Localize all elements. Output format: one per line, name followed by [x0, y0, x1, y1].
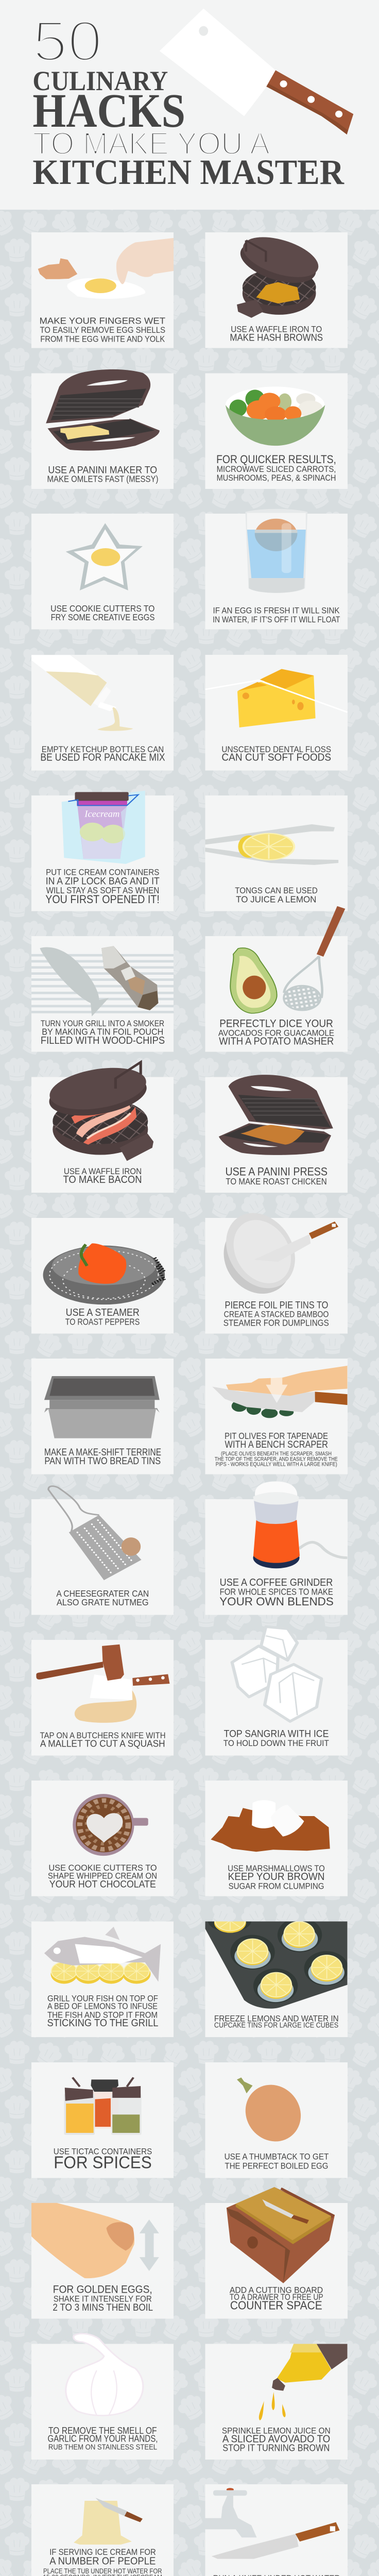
caption [221, 744, 331, 763]
caption: A CHEESEGRATER CAN [56, 1588, 149, 1599]
caption [215, 1431, 338, 1467]
caption: ADD A CUTTING BOARD [230, 2285, 323, 2295]
caption: MAKE YOUR FINGERS WET [40, 316, 165, 326]
caption: A BED OF LEMONS TO INFUSE [47, 2001, 158, 2011]
caption: TO EASILY REMOVE EGG SHELLS [40, 326, 165, 335]
panel: whipped cream shapes [31, 1781, 174, 1896]
caption [216, 453, 336, 483]
caption: AVOCADOS FOR GUACAMOLE [218, 1028, 334, 1038]
panel: cheese grater nutmeg [31, 1486, 174, 1615]
caption: 2 TO 3 MINS THEN BOIL [53, 2302, 153, 2313]
caption [56, 1588, 149, 1607]
caption: SUGAR FROM CLUMPING [229, 1882, 324, 1891]
caption: IF AN EGG IS FRESH IT WILL SINK [213, 605, 340, 615]
caption: TONGS CAN BE USED [235, 886, 318, 895]
caption: STOP IT TURNING BROWN [222, 2443, 330, 2453]
icon: drawer with cutting board [227, 2187, 335, 2283]
caption: YOU FIRST OPENED IT! [45, 893, 160, 906]
icon: ice cream tub in zip bag [62, 791, 145, 864]
icon: egg and thumbtack [237, 2077, 307, 2146]
panel: tongs juice lemon [205, 795, 348, 911]
panel: grill smoker [31, 936, 174, 1052]
caption: TO REMOVE THE SMELL OF [48, 2426, 157, 2436]
caption: A SLICED AVOVADO TO [222, 2433, 330, 2445]
icon: brown sugar and marshmallows [211, 1800, 330, 1852]
caption: TO HOLD DOWN THE FRUIT [223, 1738, 329, 1748]
panel: ice cream zip bag [31, 791, 174, 911]
caption: USE A WAFFLE IRON TO [231, 325, 322, 334]
header background [0, 0, 379, 210]
caption: PIT OLIVES FOR TAPENADE [225, 1431, 328, 1442]
caption: USE A PANINI MAKER TO [48, 464, 157, 476]
panel: lemon juice avocado [205, 2344, 348, 2460]
caption [222, 2426, 331, 2453]
caption: USE COOKIE CUTTERS TO [48, 1863, 157, 1873]
caption: A NUMBER OF PEOPLE [49, 2555, 156, 2567]
caption [228, 1863, 325, 1891]
caption: THE PERFECT BOILED EGG [225, 2161, 328, 2171]
title [32, 9, 344, 192]
icon: hot chocolate with heart [73, 1794, 148, 1856]
caption: SHAPE WHIPPED CREAM ON [48, 1871, 157, 1880]
caption: TO MAKE ROAST CHICKEN [226, 1176, 327, 1187]
caption: GARLIC FROM YOUR HANDS, [47, 2434, 158, 2444]
icon: hand shaking egg with arrow [31, 2203, 159, 2278]
panel: marshmallows brown sugar [205, 1781, 348, 1896]
panel: panini roast chicken [205, 1075, 348, 1193]
caption: FILLED WITH WOOD-CHIPS [41, 1035, 165, 1046]
icon: foil pie tins and knife [213, 1205, 338, 1301]
caption: STICKING TO THE GRILL [47, 2017, 158, 2029]
caption: ALSO GRATE NUTMEG [57, 1597, 149, 1607]
caption: STEAMER FOR DUMPLINGS [223, 1318, 329, 1328]
icon: ice cream block and knife [74, 2498, 143, 2545]
icon: egg in glass of water [245, 509, 307, 593]
caption: USE A COFFEE GRINDER [220, 1577, 333, 1588]
caption [213, 605, 340, 624]
caption [63, 1166, 142, 1185]
caption: TO JUICE A LEMON [236, 894, 316, 905]
panel: tictac spices [31, 2062, 174, 2178]
icon: bowl of vegetables [226, 386, 325, 446]
caption: USE COOKIE CUTTERS TO [50, 604, 154, 614]
title: 50 [32, 9, 102, 73]
caption: PERFECTLY DICE YOUR [219, 1018, 333, 1029]
caption [65, 1307, 140, 1327]
panel: cookie cutter eggs [31, 514, 174, 630]
caption [47, 2426, 158, 2451]
caption: KEEP YOUR BROWN [228, 1871, 324, 1883]
caption: TAP ON A BUTCHERS KNIFE WITH [40, 1731, 166, 1740]
caption: MUSHROOMS, PEAS, & SPINACH [217, 473, 336, 483]
caption [41, 1019, 165, 1046]
icon: avocado and potato masher [230, 906, 345, 1013]
caption [54, 2147, 152, 2172]
panel: ketchup bottle pancake mix [31, 655, 174, 771]
caption: YOUR OWN BLENDS [219, 1596, 334, 1608]
caption [219, 1577, 334, 1608]
icon: steamer and pepper [43, 1243, 165, 1304]
icon: cheese and floss [205, 669, 348, 727]
caption [40, 316, 165, 344]
icon: squeeze bottle [31, 655, 133, 731]
caption: FROM THE EGG WHITE AND YOLK [40, 334, 165, 344]
caption: WILL STAY AS SOFT AS WHEN [46, 885, 159, 895]
caption [225, 2151, 329, 2171]
panel: fish on lemons [31, 1922, 174, 2037]
icon: tictac spice containers [64, 2077, 142, 2135]
caption: MAKE A MAKE-SHIFT TERRINE [44, 1447, 161, 1458]
caption: YOUR HOT CHOCOLATE [49, 1878, 156, 1890]
caption: TOP SANGRIA WITH ICE [224, 1728, 329, 1739]
caption [44, 1447, 161, 1466]
caption [214, 2014, 339, 2029]
panel: avocado masher [205, 906, 348, 1052]
caption [223, 1300, 329, 1328]
panel: cutting board drawer [205, 2187, 348, 2318]
panel: hot knife cake [205, 2484, 348, 2576]
caption: FRY SOME CREATIVE EGGS [51, 613, 154, 623]
caption: PAN WITH TWO BREAD TINS [44, 1455, 161, 1466]
panel: mallet squash [31, 1640, 174, 1756]
icon: panini press with chicken [219, 1075, 333, 1155]
caption: RUB THEM ON STAINLESS STEEL [48, 2443, 157, 2451]
icon: oil-style bottle pouring drops [259, 2344, 348, 2420]
caption: USE A WAFFLE IRON [64, 1166, 142, 1176]
caption: USE A STEAMER [66, 1307, 140, 1318]
icon: ice cream tub in zip bag: Icecream [84, 809, 119, 819]
panel: coffee grinder spices [205, 1481, 348, 1615]
title: TO MAKE YOU A [32, 126, 270, 161]
caption: USE TICTAC CONTAINERS [54, 2147, 152, 2156]
caption [47, 1993, 158, 2029]
icon: two bread tins [44, 1376, 160, 1438]
caption [235, 886, 318, 905]
panel: thumbtack egg [205, 2062, 348, 2178]
caption [45, 868, 160, 906]
caption: EMPTY KETCHUP BOTTLES CAN [42, 744, 164, 754]
panel: serving ice cream [31, 2484, 174, 2576]
panel: sangria ice [205, 1626, 348, 1756]
caption: BE USED FOR PANCAKE MIX [40, 751, 165, 763]
caption: FOR GOLDEN EGGS, [53, 2283, 152, 2295]
caption: MAKE OMLETS FAST (MESSY) [47, 474, 158, 484]
caption: TO A DRAWER TO FREE UP [230, 2292, 323, 2301]
caption: GRILL YOUR FISH ON TOP OF [47, 1993, 158, 2003]
caption [48, 1863, 157, 1890]
icon: egg, shell and hand [38, 238, 174, 299]
caption: MICROWAVE SLICED CARROTS, [217, 464, 336, 474]
panel: waffle hash browns [205, 229, 348, 348]
icon: waffle iron with hash browns [233, 229, 325, 318]
icon: grill, fish and foil pouch [31, 946, 174, 1016]
caption: BY MAKING A TIN FOIL POUCH [42, 1027, 163, 1037]
caption: CAN CUT SOFT FOODS [221, 751, 331, 763]
panel: golden eggs [31, 2203, 174, 2318]
icon: panini maker with omelet [46, 369, 160, 451]
panel: waffle iron bacon [31, 1061, 174, 1193]
caption: WITH A POTATO MASHER [219, 1035, 334, 1047]
caption: WITH A BENCH SCRAPER [225, 1439, 328, 1450]
title: CULINARY [32, 65, 168, 96]
icon: cupcake tin with lemons [205, 1922, 348, 2009]
caption: SPRINKLE LEMON JUICE ON [222, 2426, 331, 2435]
caption [40, 744, 165, 763]
panel: dental floss cheese [205, 655, 348, 771]
panel: terrine pan [31, 1359, 174, 1475]
caption: USE MARSHMALLOWS TO [228, 1863, 325, 1873]
icon: tap and knife [205, 2488, 340, 2559]
caption [223, 1728, 329, 1748]
icon: garlic bulb [66, 2334, 143, 2415]
panel: pie tin steamer [205, 1205, 348, 1333]
icon: hand, scraper and olives [212, 1366, 348, 1418]
caption: PIERCE FOIL PIE TINS TO [225, 1300, 328, 1311]
icon: mallet, butcher knife and squash [36, 1645, 170, 1723]
panel: garlic smell [31, 2334, 174, 2460]
caption [225, 1165, 328, 1187]
caption [40, 1731, 166, 1749]
icon: ice cubes [232, 1626, 321, 1721]
caption: UNSCENTED DENTAL FLOSS [221, 744, 331, 754]
icon: star cutter with egg [66, 523, 143, 590]
panel: steamer peppers [31, 1218, 174, 1333]
icon: grater and nutmeg [48, 1486, 142, 1580]
caption: SHAKE IT INTENSELY FOR [54, 2294, 152, 2303]
icon: coffee grinder [253, 1481, 348, 1568]
caption: TURN YOUR GRILL INTO A SMOKER [41, 1019, 164, 1028]
caption: FOR QUICKER RESULTS, [216, 453, 336, 466]
caption [47, 464, 158, 484]
caption: MAKE HASH BROWNS [230, 332, 323, 343]
icon: waffle iron with bacon [45, 1061, 153, 1161]
icon: fish on bed of lemons [44, 1927, 161, 1984]
caption [230, 2285, 323, 2312]
caption [50, 604, 154, 623]
caption: IF SERVING ICE CREAM FOR [49, 2548, 156, 2557]
caption: CREATE A STACKED BAMBOO [224, 1309, 329, 1319]
caption: FREEZE LEMONS AND WATER IN [214, 2014, 339, 2023]
panel: frozen lemon ice cubes [205, 1922, 348, 2037]
panel: microwave vegetables [205, 373, 348, 489]
caption: THE FISH AND STOP IT FROM [47, 2010, 158, 2020]
icon: tongs and lemon [205, 824, 338, 865]
panel: fresh egg test [205, 509, 348, 630]
caption: PUT ICE CREAM CONTAINERS [46, 868, 159, 877]
caption: IN A ZIP LOCK BAG AND IT [46, 875, 160, 887]
caption: A MALLET TO CUT A SQUASH [40, 1739, 165, 1749]
caption [53, 2283, 153, 2313]
caption: TO MAKE BACON [63, 1174, 142, 1185]
panel: pit olives [205, 1359, 348, 1475]
caption [230, 325, 323, 343]
caption: FOR WHOLE SPICES TO MAKE [220, 1587, 333, 1597]
caption [43, 2548, 163, 2576]
caption: USE A THUMBTACK TO GET [225, 2151, 329, 2161]
caption [218, 1018, 334, 1047]
icon: cleaver [160, 9, 353, 134]
caption: PLACE THE TUB UNDER HOT WATER FOR [43, 2567, 162, 2575]
panel: wet fingers [31, 232, 174, 348]
caption: USE A PANINI PRESS [225, 1165, 328, 1178]
panel: panini omelet [31, 369, 174, 489]
caption: TO ROAST PEPPERS [65, 1317, 140, 1327]
caption: FOR SPICES [54, 2153, 152, 2172]
title: HACKS [32, 84, 185, 138]
caption: COUNTER SPACE [230, 2299, 322, 2312]
